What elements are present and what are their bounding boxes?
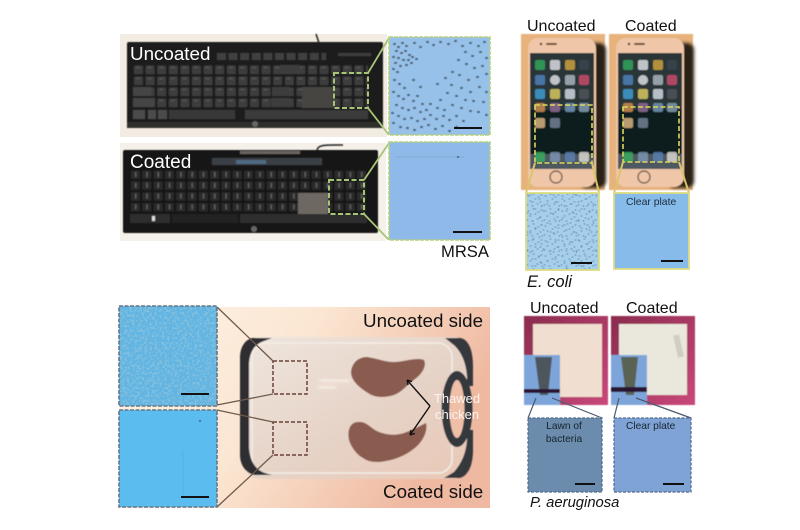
panel: chicken coated plate — [119, 410, 217, 507]
label: thawed chicken: Thawed — [434, 391, 480, 406]
panel: coated phone photo — [609, 34, 694, 190]
label: clear plate: Clear plate — [626, 197, 676, 208]
dark left handle — [240, 338, 272, 475]
heading: fabric uncoated: Uncoated — [530, 300, 598, 317]
inset: agar tube — [611, 355, 647, 405]
callout: uncoated phone selection and zoom lines — [526, 105, 599, 193]
label: coated keyboard: Coated — [130, 152, 191, 173]
panel: coated keyboard photo — [120, 143, 386, 241]
scale bar — [571, 262, 592, 264]
chicken — [351, 357, 425, 397]
callout: fabric zoom lines — [528, 398, 691, 418]
heading: fabric coated: Coated — [626, 300, 678, 317]
panel: MRSA coated clear plate — [389, 142, 490, 240]
label: clear plate: Clear plate — [626, 421, 676, 432]
heading: phone coated: Coated — [625, 18, 677, 35]
callout: coated phone selection and zoom lines — [614, 107, 689, 193]
heading: phone uncoated: Uncoated — [527, 18, 596, 35]
label: uncoated keyboard: Uncoated — [130, 43, 210, 64]
panel: uncoated phone photo — [521, 34, 606, 190]
label: lawn of bacteria: Lawn of — [546, 421, 582, 432]
callout: uncoated keyboard selection and zoom lines — [334, 38, 389, 135]
heading: uncoated side: Uncoated side — [363, 310, 483, 331]
label: MRSA: MRSA — [441, 242, 490, 261]
panel: uncoated keyboard photo — [120, 34, 387, 137]
heading: coated side: Coated side — [383, 481, 483, 502]
dark right handle — [445, 338, 473, 386]
callout: cutting board selections — [217, 307, 307, 507]
scale bar — [663, 483, 684, 485]
colonies — [392, 41, 487, 131]
label: P. aeruginosa: P. aeruginosa — [530, 495, 619, 511]
scale bar — [453, 231, 482, 233]
panel: MRSA plate with colonies — [389, 37, 490, 135]
callout: coated keyboard selection and zoom lines — [329, 143, 389, 240]
label: thawed chicken: chicken — [435, 407, 479, 422]
panel: P. aeruginosa uncoated plate — [528, 418, 602, 492]
panel: uncoated fabric photo — [524, 316, 608, 405]
panel: cutting board photo — [120, 307, 490, 508]
scale bar — [181, 496, 209, 498]
label: E. coli: E. coli — [527, 273, 573, 291]
arrow: thawed chicken pointers — [407, 380, 430, 435]
panel: E. coli coated clear plate — [614, 193, 689, 269]
panel: E. coli uncoated plate — [526, 193, 599, 270]
scale bar — [181, 393, 209, 395]
panel: P. aeruginosa coated plate — [614, 418, 691, 492]
inset: agar tube — [524, 355, 560, 405]
panel: coated fabric photo — [611, 316, 695, 405]
label: lawn of bacteria: bacteria — [546, 434, 582, 445]
cutting board — [244, 337, 469, 479]
scale bar — [454, 127, 482, 129]
scale bar — [575, 483, 595, 485]
scale bar — [661, 260, 683, 262]
panel: chicken uncoated plate — [119, 306, 217, 406]
